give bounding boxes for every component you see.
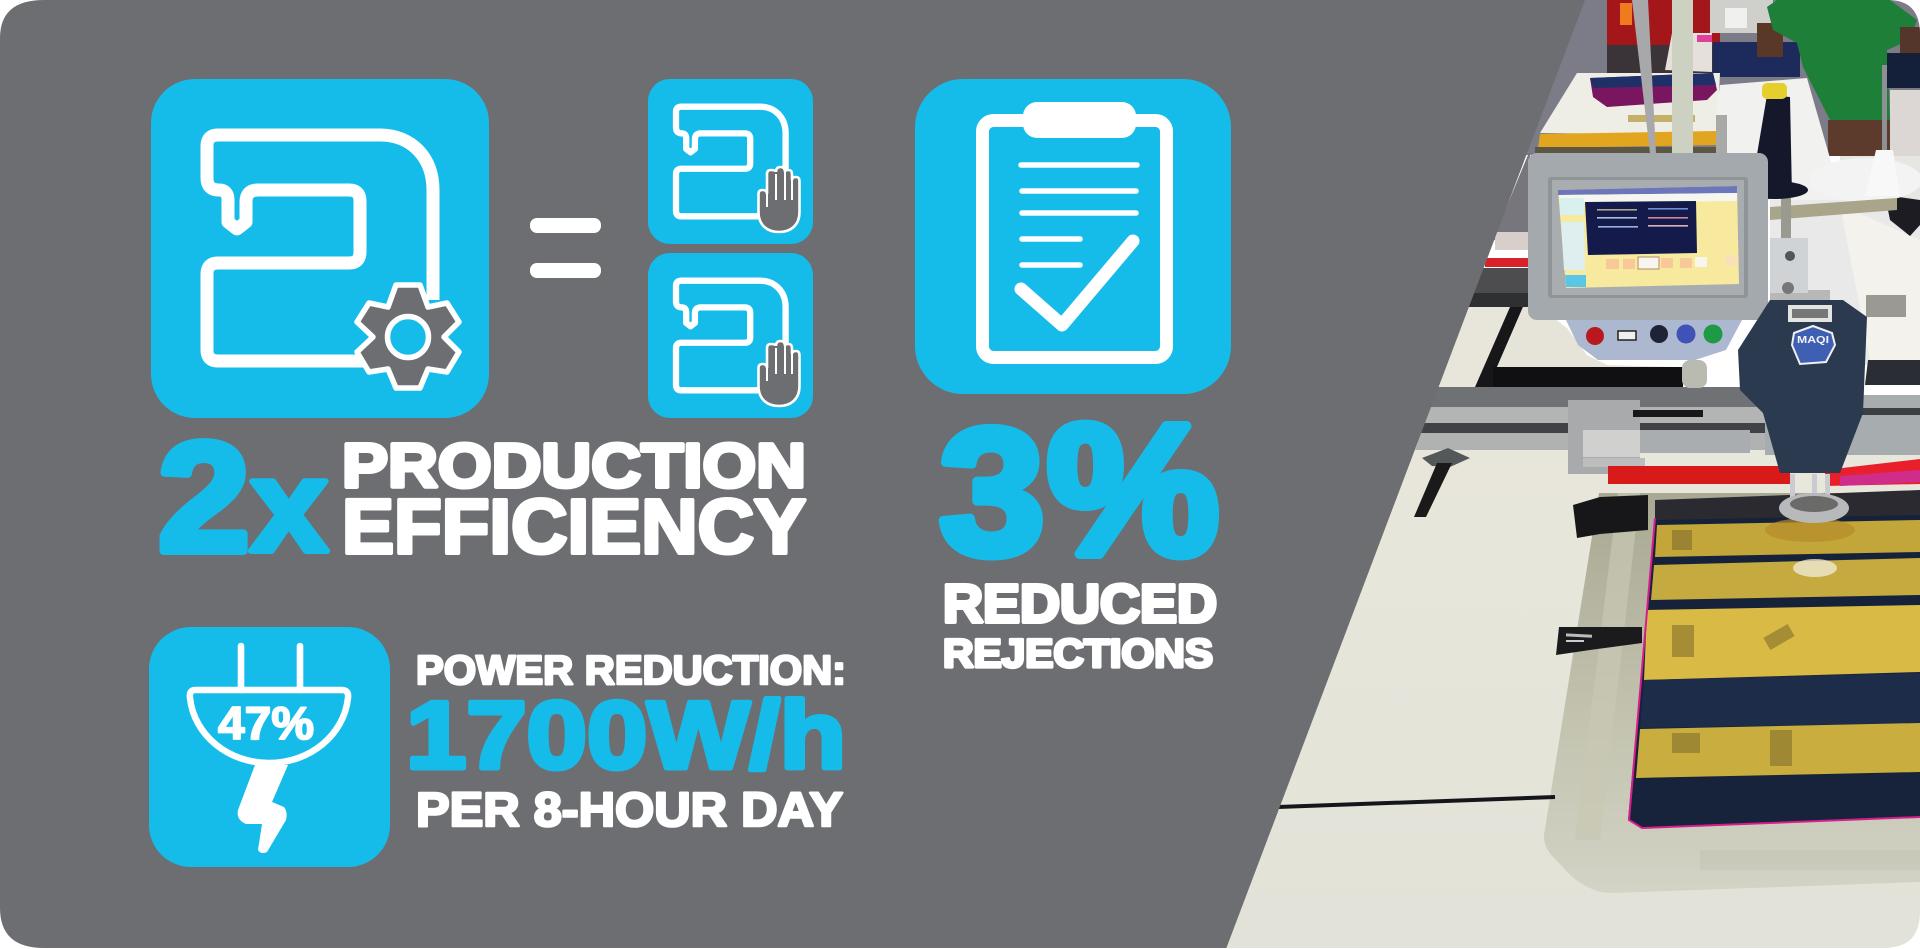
equals sign <box>530 218 601 278</box>
stat: 3 percent reduced rejections <box>939 387 1219 676</box>
stat: 3 percent reduced rejections: REJECTIONS <box>943 632 1213 676</box>
icon: power plug with 47%: 47% <box>218 697 314 749</box>
logo: machine brand badge: MAQI <box>1797 335 1829 346</box>
photo: automated sewing machine <box>1200 0 1920 949</box>
text: power reduction: 1700W/h <box>406 682 846 789</box>
heading: 2x production efficiency: PRODUCTION <box>342 432 806 501</box>
icon: power plug with 47% <box>149 627 390 867</box>
heading: 2x production efficiency: EFFICIENCY <box>342 484 806 570</box>
heading: 2x production efficiency: x <box>250 432 328 579</box>
text: power reduction: PER 8-HOUR DAY <box>416 784 843 837</box>
text: power reduction <box>406 647 846 837</box>
icon: big sewing machine with gear <box>151 79 489 418</box>
icon: clipboard with check <box>915 79 1231 394</box>
logo: machine brand badge <box>1792 326 1835 364</box>
heading: 2x production efficiency: 2 <box>158 411 250 585</box>
stat: 3 percent reduced rejections: % <box>1047 387 1219 594</box>
stat: 3 percent reduced rejections: 3 <box>939 392 1045 593</box>
stat: 3 percent reduced rejections: REDUCED <box>943 574 1217 634</box>
icon: gear <box>357 285 459 388</box>
heading: 2x production efficiency <box>158 411 806 585</box>
icon: manual sewing machine top <box>648 79 813 244</box>
icon: manual sewing machine bottom <box>648 253 813 418</box>
text: power reduction: POWER REDUCTION: <box>416 647 846 693</box>
